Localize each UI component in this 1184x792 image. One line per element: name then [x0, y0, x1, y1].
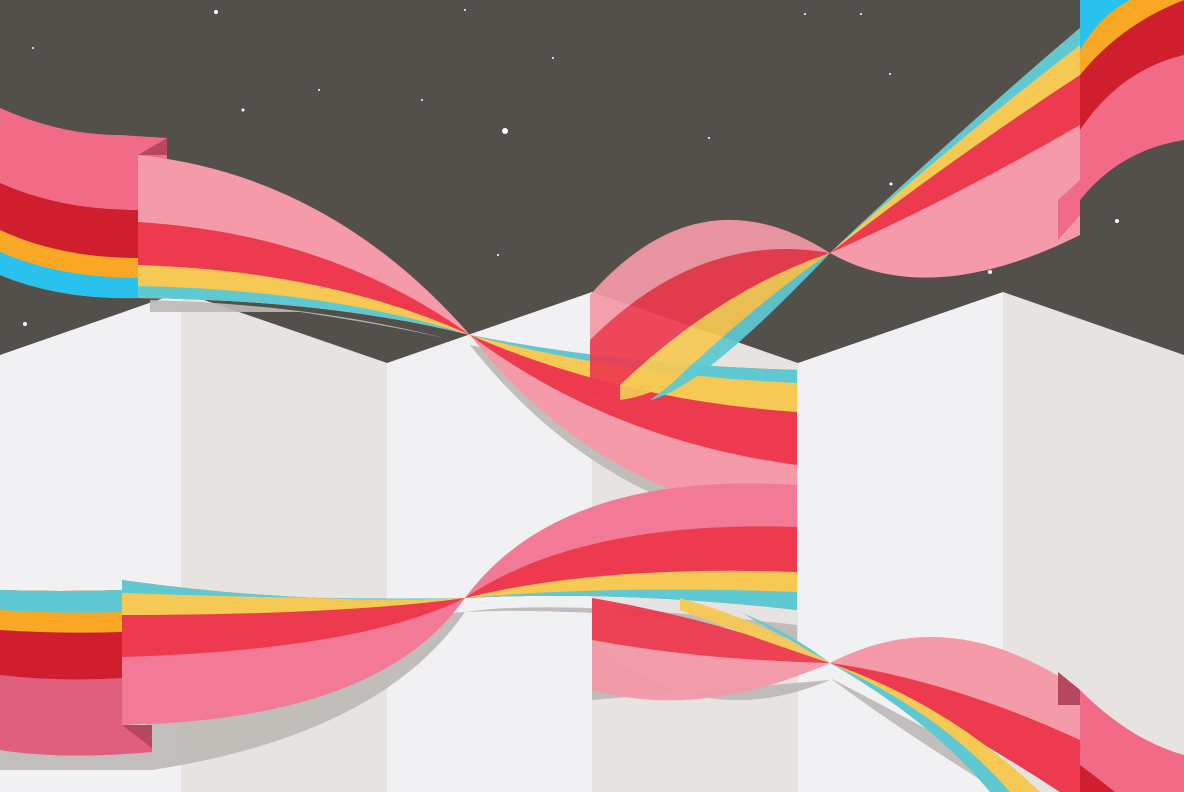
- ribbon: upper right stub: [1058, 0, 1184, 240]
- ribbon: upper fan to twist: [138, 155, 470, 335]
- folded paper panels: [0, 292, 1184, 792]
- ribbon: lower descending fan: [592, 598, 830, 700]
- ribbon: lower middle fan: [465, 483, 797, 610]
- ribbon: upper rising fan: [590, 220, 830, 400]
- stars: [23, 9, 1119, 326]
- ribbon: upper middle fan: [470, 335, 797, 520]
- ribbon: upper left stub: [0, 108, 167, 298]
- ribbon: upper right fan: [830, 28, 1080, 278]
- ribbon: lower left stub: [0, 590, 152, 756]
- ribbon: lower right stub: [1058, 672, 1184, 792]
- ribbon: lower left fan: [122, 580, 465, 725]
- ribbon shadows: [0, 300, 1040, 792]
- ribbon: lower right fan: [830, 637, 1080, 792]
